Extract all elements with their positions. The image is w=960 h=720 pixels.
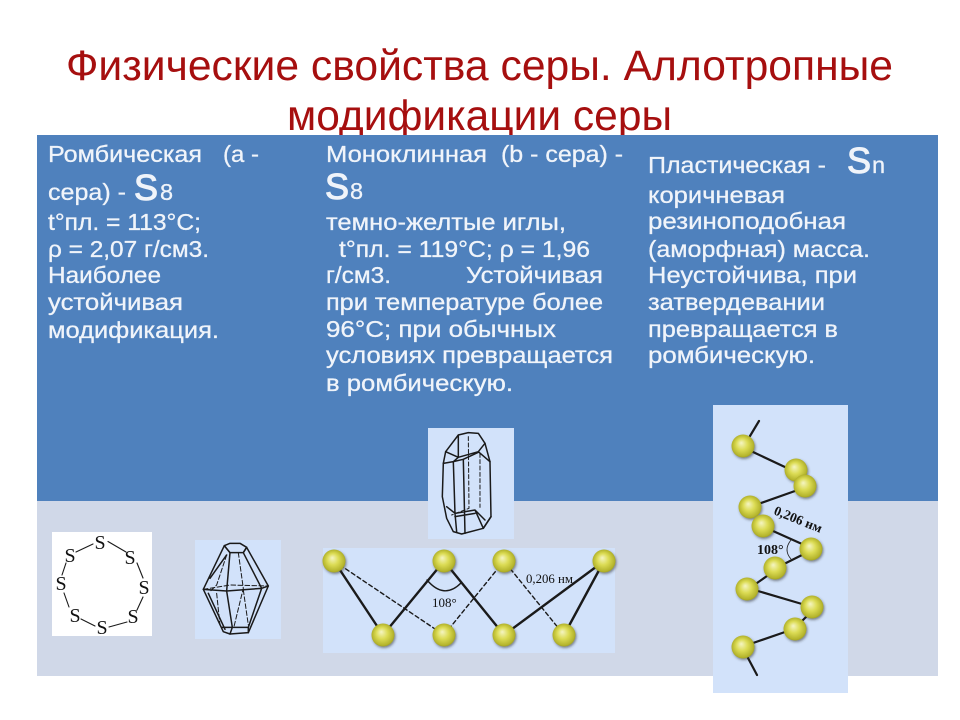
title (66, 42, 893, 140)
diagram: rhombic crystal (195, 540, 281, 639)
diagram: S8 ring: S (127, 606, 139, 628)
diagram: S8 ring: S (138, 577, 150, 599)
text block: plastic sulfur (648, 140, 885, 368)
diagram: S8 ring: S (96, 617, 108, 639)
text block: monoclinic sulfur: условиях превращается (326, 342, 613, 368)
text block: plastic sulfur: ромбическую. (648, 342, 815, 368)
diagram: zigzag S8 molecule: 108° (432, 595, 457, 610)
text block: rhombic sulfur: 8 (160, 179, 173, 205)
text block: plastic sulfur: коричневая (648, 182, 785, 208)
title: модификации серы (287, 92, 672, 140)
text block: monoclinic sulfur: t°пл. = 119°C; ρ = 1,96 (339, 236, 590, 262)
text block: plastic sulfur: Пластическая - (648, 152, 826, 178)
text block: monoclinic sulfur (325, 141, 623, 396)
text block: monoclinic sulfur: в ромбическую. (326, 370, 513, 396)
text block: rhombic sulfur: модификация. (48, 317, 219, 343)
text block: rhombic sulfur: Ромбическая (48, 141, 202, 167)
diagram: S8 ring (52, 532, 152, 639)
text block: plastic sulfur: превращается в (648, 316, 838, 342)
diagram: plastic sulfur helix (713, 405, 848, 693)
text block: monoclinic sulfur: темно-желтые иглы, (326, 209, 566, 235)
text block: monoclinic sulfur: Моноклинная (326, 141, 487, 167)
text block: rhombic sulfur: Наиболее (48, 262, 161, 288)
text block: monoclinic sulfur: 8 (350, 178, 363, 204)
text block: rhombic sulfur: устойчивая (48, 289, 183, 315)
diagram: S8 ring: S (69, 605, 81, 627)
title: Физические свойства серы. Аллотропные (66, 42, 893, 90)
text block: rhombic sulfur (48, 141, 259, 343)
text block: rhombic sulfur: ρ = 2,07 г/см3. (48, 236, 209, 262)
text block: monoclinic sulfur: при температуре более (326, 289, 603, 315)
diagram: zigzag S8 molecule (322, 548, 616, 653)
text block: monoclinic sulfur: Устойчивая (466, 262, 603, 288)
text block: plastic sulfur: резиноподобная (648, 208, 846, 234)
diagram: S8 ring: S (94, 532, 106, 554)
text block: plastic sulfur: (аморфная) масса. (648, 236, 870, 262)
diagram: plastic sulfur helix: 108° (757, 543, 784, 558)
text block: monoclinic sulfur: S (325, 166, 349, 207)
diagram: S8 ring: S (64, 545, 76, 567)
panel: background table (37, 135, 938, 676)
text block: monoclinic sulfur: 96°C; при обычных (326, 316, 556, 342)
text block: plastic sulfur: S (847, 140, 871, 181)
text block: rhombic sulfur: сера) - (48, 179, 126, 205)
text block: rhombic sulfur: (а - (223, 141, 259, 167)
text block: rhombic sulfur: S (134, 167, 158, 208)
diagram: plastic sulfur helix: 0,206 нм (772, 503, 825, 536)
text block: monoclinic sulfur: (b - сера) - (501, 141, 623, 167)
diagram: S8 ring: S (124, 547, 136, 569)
text block: plastic sulfur: n (872, 152, 885, 178)
diagram: S8 ring: S (55, 573, 67, 595)
diagram: zigzag S8 molecule: 0,206 нм (526, 571, 573, 586)
text block: plastic sulfur: Неустойчива, при (648, 262, 857, 288)
diagram: monoclinic crystal (428, 428, 514, 539)
text block: monoclinic sulfur: г/см3. (326, 262, 391, 288)
text block: plastic sulfur: затвердевании (648, 289, 825, 315)
text block: rhombic sulfur: t°пл. = 113°C; (48, 209, 201, 235)
